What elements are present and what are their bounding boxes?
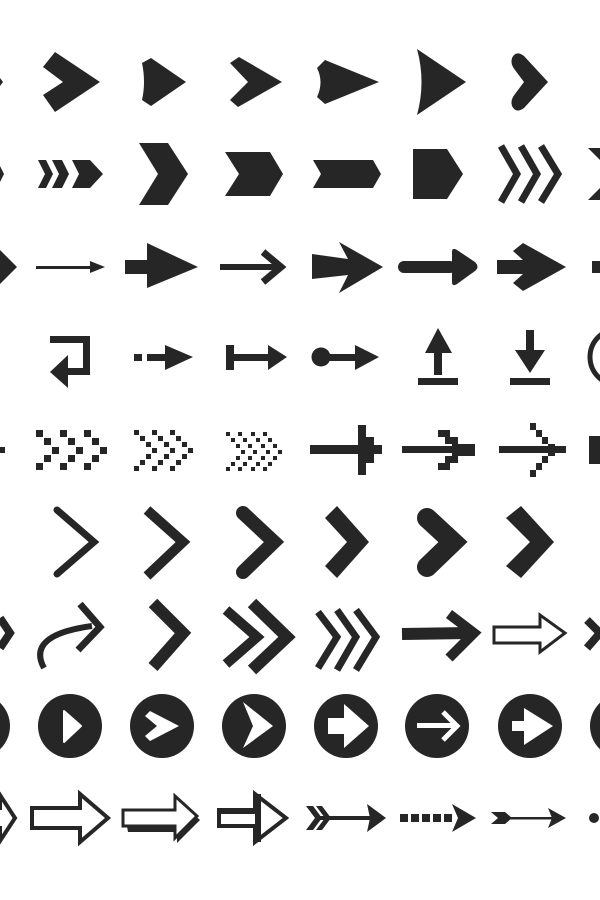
row 9: outline and decorative arrows [0, 794, 599, 843]
row 8: circle arrow buttons [0, 694, 600, 758]
row 2: chevron banners [0, 143, 600, 205]
row 1: solid arrowheads [0, 49, 548, 115]
row 3: arrows with shafts [0, 242, 600, 293]
row 7: brush arrows [0, 603, 600, 670]
row 4: utility arrows [50, 328, 600, 388]
row 5: pixel arrows [0, 423, 600, 477]
row 6: chevrons [57, 506, 554, 578]
